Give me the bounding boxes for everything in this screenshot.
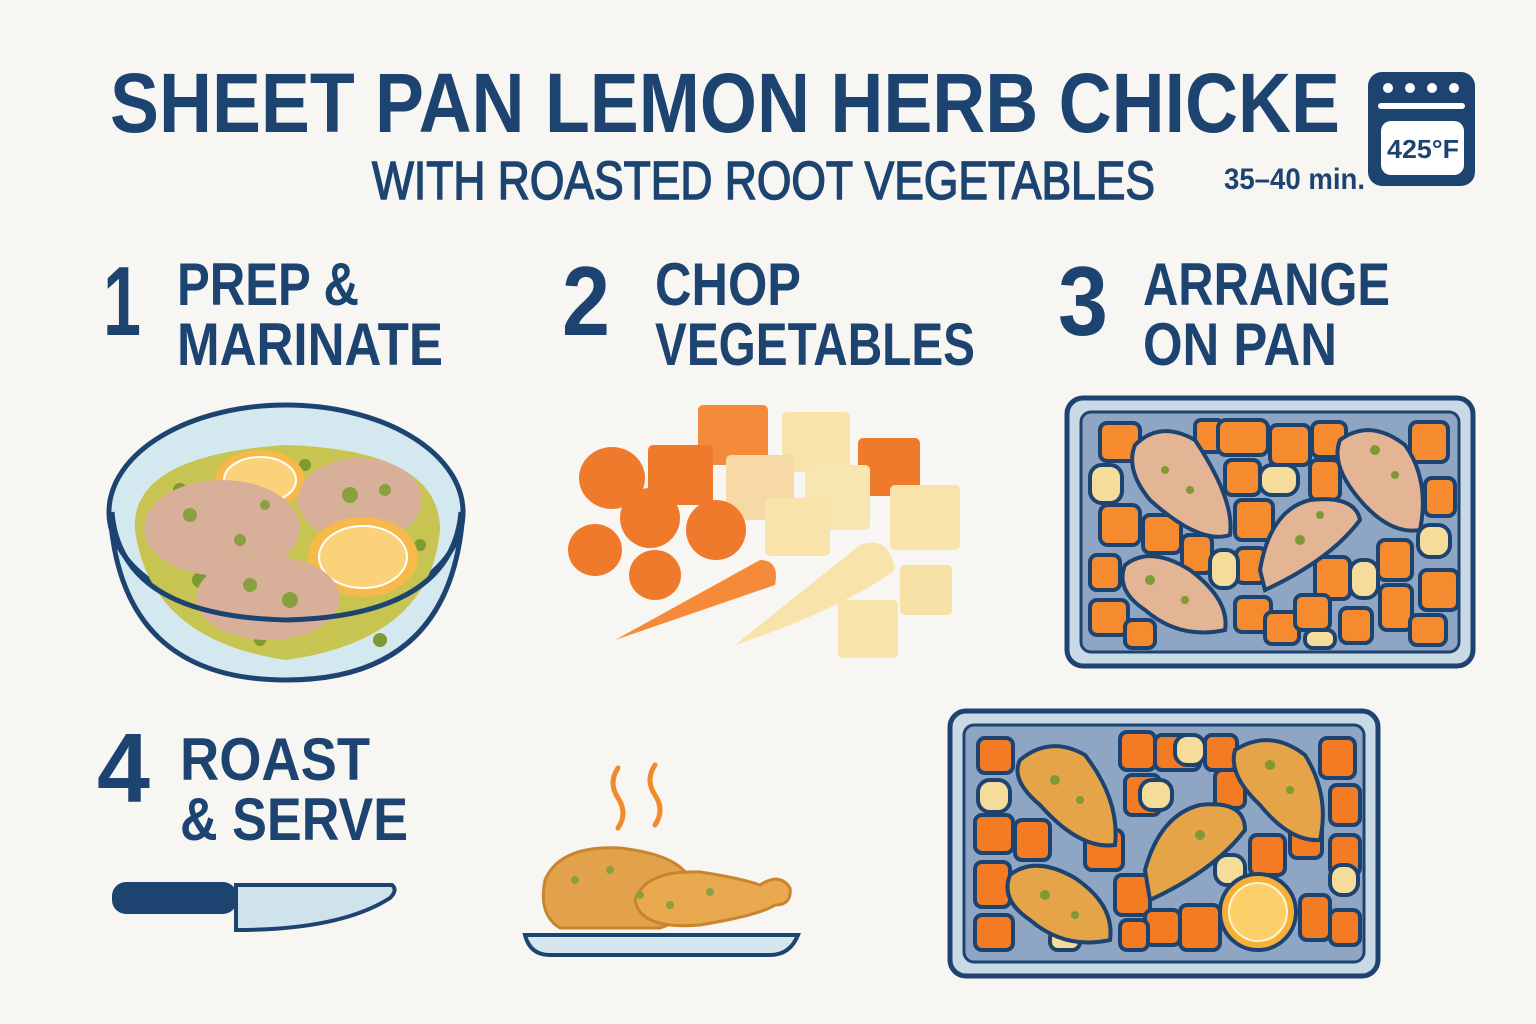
step 1 heading: PREP & bbox=[177, 251, 359, 318]
sheet pan roasted bbox=[950, 711, 1378, 976]
step 1 heading: 1 bbox=[103, 246, 141, 356]
step 4 heading bbox=[97, 713, 408, 853]
step 2 heading: CHOP bbox=[655, 251, 801, 318]
step 1 heading bbox=[103, 246, 443, 378]
step 1 heading: MARINATE bbox=[177, 311, 443, 378]
chopped vegetables bbox=[568, 405, 960, 658]
step 3 heading: ARRANGE bbox=[1143, 251, 1390, 318]
step 2 heading bbox=[562, 246, 975, 378]
step 2 heading: VEGETABLES bbox=[655, 311, 975, 378]
step 4 heading: 4 bbox=[97, 713, 150, 823]
step 4 heading: & SERVE bbox=[180, 786, 408, 853]
step 3 heading: ON PAN bbox=[1143, 311, 1337, 378]
step 3 heading bbox=[1058, 246, 1390, 378]
sheet pan arranged bbox=[1067, 398, 1473, 666]
step 4 heading: ROAST bbox=[180, 726, 370, 793]
icon: steam bbox=[613, 765, 660, 828]
lemon slice bbox=[1220, 874, 1296, 950]
step 2 heading: 2 bbox=[562, 246, 610, 356]
bowl with marinade bbox=[109, 405, 463, 680]
subtitle: WITH ROASTED ROOT VEGETABLES bbox=[372, 151, 1155, 211]
step 3 heading: 3 bbox=[1058, 246, 1108, 356]
icon: oven 425F: 425°F bbox=[1387, 134, 1459, 164]
icon: oven 425F bbox=[1368, 72, 1475, 186]
title: SHEET PAN LEMON HERB CHICKE bbox=[110, 56, 1340, 150]
icon: knife bbox=[112, 882, 395, 930]
roasted chicken on plate bbox=[525, 848, 798, 955]
cook time: 35–40 min. bbox=[1224, 163, 1365, 196]
